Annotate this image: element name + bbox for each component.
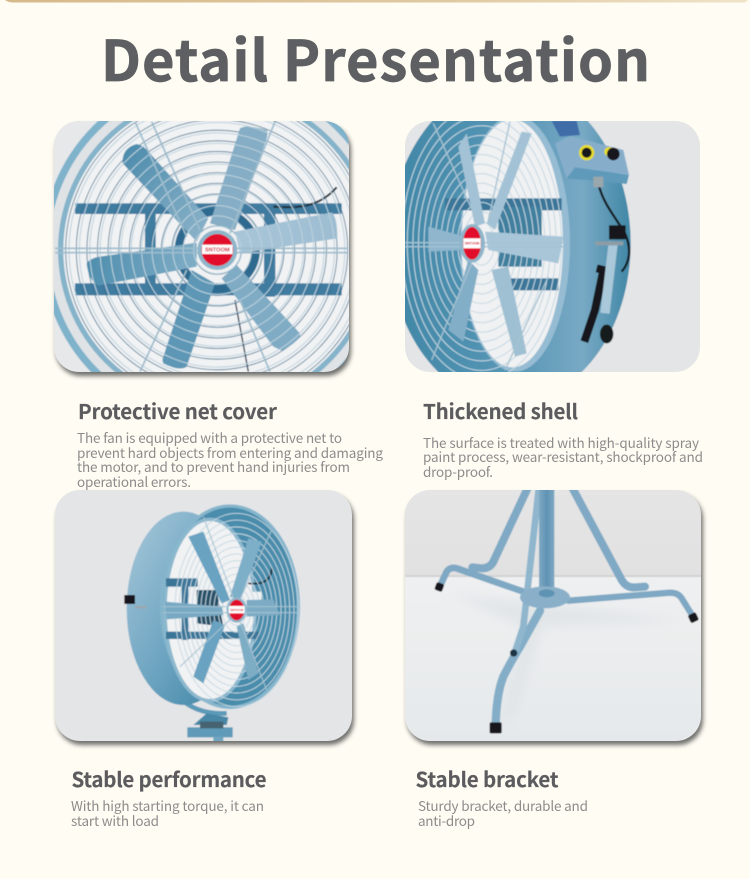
text block: stable performance bbox=[71, 795, 264, 830]
text block: stable bracket: Sturdy bracket, durable and bbox=[418, 795, 588, 815]
hub badge: SNTOOM bbox=[465, 242, 479, 246]
hub badge: SNTOOM bbox=[205, 247, 230, 253]
rating label bbox=[552, 121, 580, 137]
text block: stable performance: start with load bbox=[71, 810, 159, 830]
yoke and base bbox=[184, 703, 234, 741]
text block: protective net cover: the motor, and to prevent hand injuries from bbox=[77, 456, 350, 476]
heading: stable bracket: Stable bracket bbox=[416, 763, 559, 793]
text block: stable bracket bbox=[418, 795, 588, 830]
text block: protective net cover: prevent hard objects from entering and damaging bbox=[77, 442, 383, 462]
hub badge: SNTOOM bbox=[230, 608, 244, 612]
base disc bbox=[520, 586, 570, 608]
top accent band bbox=[5, 0, 748, 2]
fan blades bbox=[165, 532, 280, 683]
floor shadows bbox=[482, 600, 617, 662]
tripod legs and braces bbox=[440, 487, 693, 723]
text block: thickened shell: drop-proof. bbox=[423, 461, 493, 481]
panel: protective net cover photo bbox=[52, 121, 354, 380]
text block: protective net cover: The fan is equipped with a protective net to bbox=[77, 427, 342, 447]
fan blades bbox=[87, 127, 337, 369]
heading: protective net cover: Protective net cover bbox=[78, 395, 277, 425]
text block: thickened shell bbox=[423, 432, 703, 481]
heading: stable performance: Stable performance bbox=[72, 763, 267, 793]
hub badge bbox=[197, 230, 237, 270]
fan blades bbox=[428, 132, 563, 357]
text block: thickened shell: paint process, wear-resistant, shockproof and bbox=[423, 446, 703, 466]
control box with switches bbox=[555, 136, 629, 184]
panel: stable performance photo bbox=[54, 490, 358, 748]
rubber feet bbox=[434, 582, 699, 733]
text block: stable performance: With high starting torque, it can bbox=[71, 795, 264, 815]
text block: thickened shell: The surface is treated with high-quality spray bbox=[423, 432, 699, 452]
title: Detail Presentation bbox=[101, 17, 650, 98]
side knob bbox=[124, 595, 147, 608]
heading: thickened shell: Thickened shell bbox=[423, 395, 578, 425]
panel: stable bracket photo bbox=[404, 490, 706, 748]
text block: stable bracket: anti-drop bbox=[418, 810, 475, 830]
panel: thickened shell photo bbox=[405, 121, 700, 372]
hub badge bbox=[227, 597, 247, 623]
hub badge bbox=[460, 224, 485, 263]
text block: protective net cover: operational errors. bbox=[77, 471, 191, 491]
text block: protective net cover bbox=[77, 427, 383, 491]
power cable and bracket bbox=[584, 177, 629, 343]
